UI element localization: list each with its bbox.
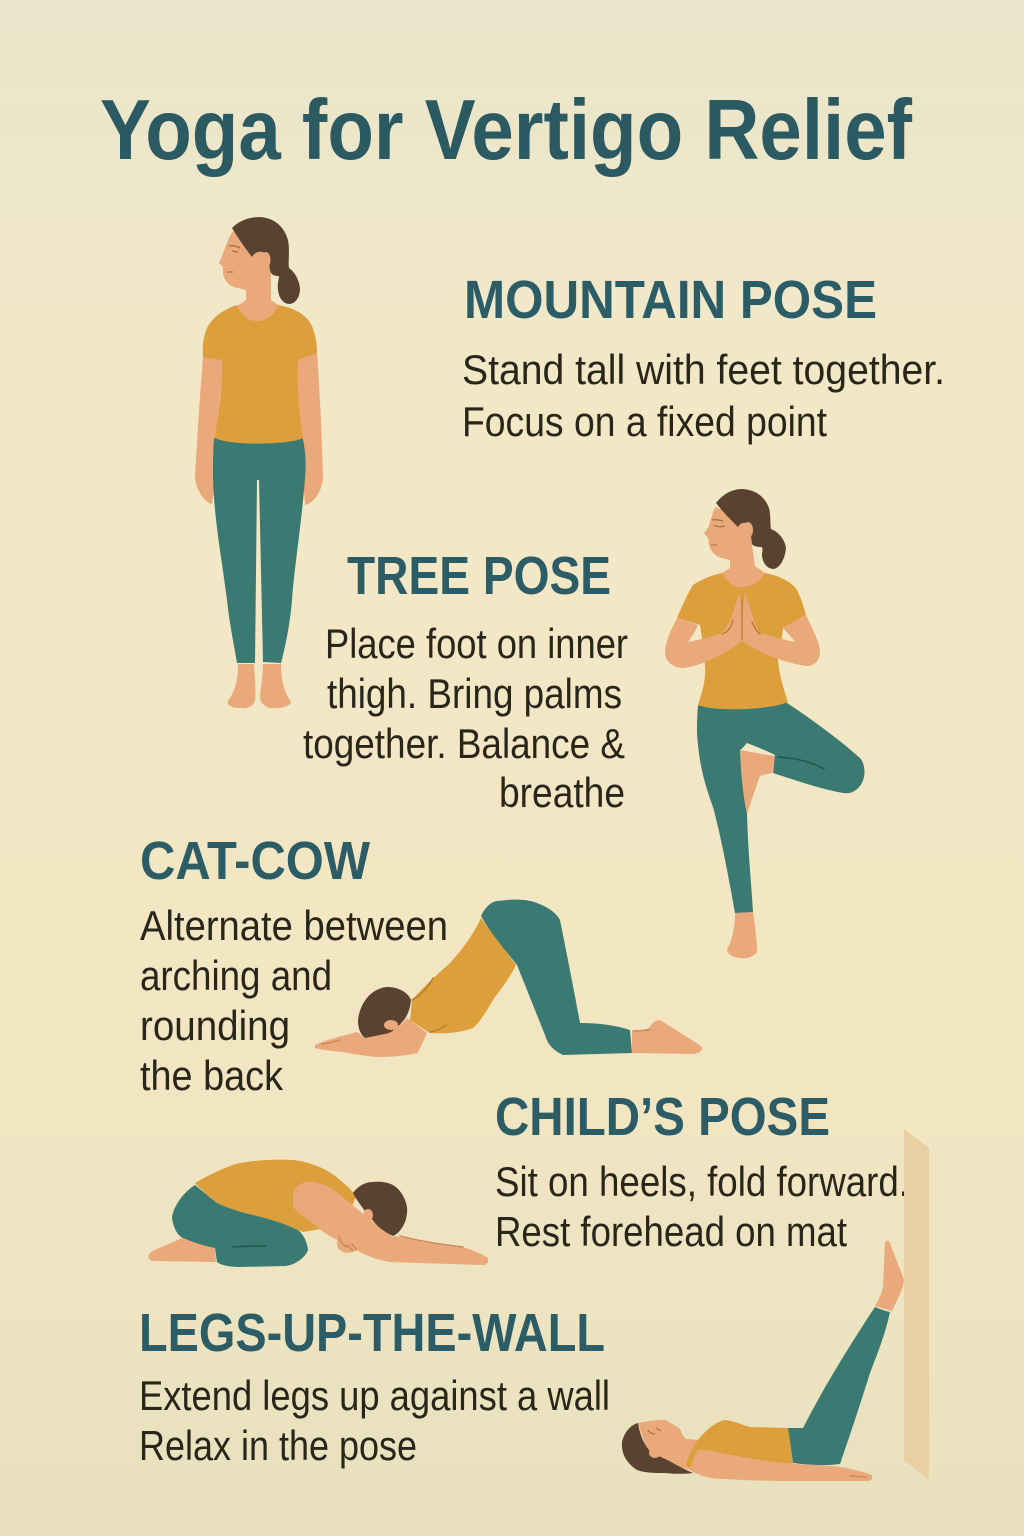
description: cat-cow: Alternate between <box>140 902 448 949</box>
heading: child's pose: CHILD’S POSE <box>495 1087 830 1147</box>
ear <box>384 1020 398 1030</box>
description: tree pose <box>303 620 628 816</box>
panel: child's pose <box>149 1087 909 1267</box>
title: Yoga for Vertigo Relief <box>100 83 913 178</box>
description: cat-cow: arching and <box>140 952 332 999</box>
description: child's pose: Sit on heels, fold forward. <box>495 1158 909 1205</box>
ear <box>649 1448 661 1458</box>
figure: woman in child's pose <box>149 1160 488 1267</box>
figure: woman lying with legs up the wall <box>622 1241 904 1481</box>
description: tree pose: breathe <box>499 769 625 816</box>
description: legs-up-the-wall: Relax in the pose <box>139 1422 417 1469</box>
description: cat-cow <box>140 902 448 1099</box>
panel: tree pose <box>303 489 864 958</box>
description: legs-up-the-wall: Extend legs up against a wall <box>139 1372 610 1419</box>
figure: woman standing in mountain pose <box>195 217 323 708</box>
heading: cat-cow: CAT-COW <box>140 831 370 891</box>
ear <box>363 1209 373 1221</box>
heading: tree pose: TREE POSE <box>347 546 611 606</box>
description: legs-up-the-wall <box>139 1372 610 1469</box>
heading: mountain pose: MOUNTAIN POSE <box>464 270 877 330</box>
heading: legs-up-the-wall: LEGS-UP-THE-WALL <box>139 1303 605 1363</box>
description: mountain pose <box>462 346 945 445</box>
description: tree pose: together. Balance & <box>303 720 625 767</box>
description: child's pose <box>495 1158 909 1255</box>
ear <box>743 522 753 538</box>
description: cat-cow: rounding <box>140 1002 290 1049</box>
panel: cat-cow <box>140 831 702 1099</box>
figure: woman balancing in tree pose <box>665 489 864 958</box>
wall <box>904 1129 929 1480</box>
description: cat-cow: the back <box>140 1052 284 1099</box>
ear <box>262 252 270 268</box>
description: mountain pose: Stand tall with feet together. <box>462 346 945 393</box>
panel: mountain pose <box>195 217 945 708</box>
description: mountain pose: Focus on a fixed point <box>462 398 827 445</box>
description: tree pose: Place foot on inner <box>325 620 628 667</box>
figure: woman in cat-cow stretch <box>315 900 702 1057</box>
description: child's pose: Rest forehead on mat <box>495 1208 847 1255</box>
description: tree pose: thigh. Bring palms <box>327 670 622 717</box>
panel: legs-up-the-wall <box>139 1129 929 1481</box>
